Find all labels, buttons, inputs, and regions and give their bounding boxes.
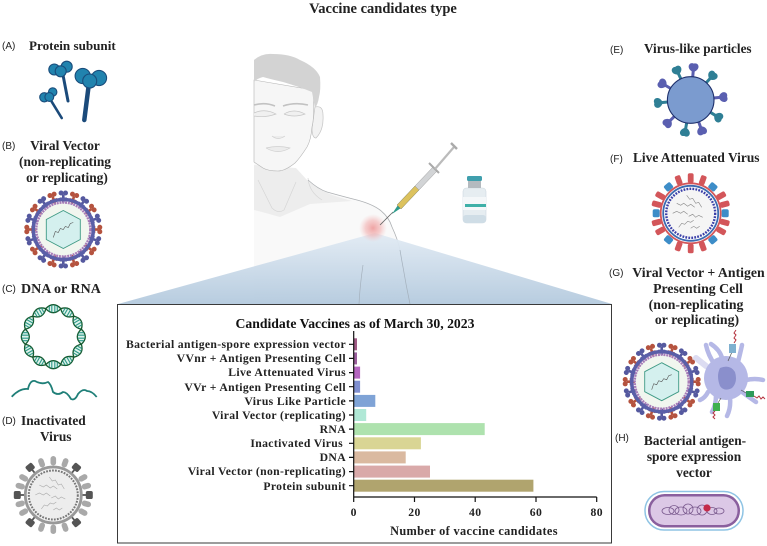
icon: inactivated virus particle — [14, 456, 93, 534]
label F: (F) — [610, 154, 623, 165]
icon: virus-like particle — [654, 63, 728, 137]
category labels: Virus Like Particle — [244, 395, 346, 408]
x axis tick labels: 0 — [351, 506, 357, 519]
category labels — [126, 338, 346, 493]
chart title: Candidate Vaccines as of March 30, 2023 — [236, 316, 475, 331]
panel: icon D inactivated virus — [2, 413, 93, 534]
ear — [312, 107, 323, 138]
hair — [254, 54, 320, 108]
icon: protein spikes — [40, 61, 107, 120]
injection site glow — [359, 214, 387, 242]
heading D: Virus — [40, 429, 72, 444]
label A: (A) — [2, 41, 15, 52]
category labels: Protein subunit — [263, 480, 346, 493]
panel: icon G viral vector plus antigen presenting cell — [609, 265, 765, 421]
bars — [354, 338, 533, 492]
icon: viral vector particle — [24, 190, 102, 268]
panel: icon B viral vector — [2, 138, 111, 268]
heading G: Presenting Cell — [653, 281, 743, 296]
axes — [349, 331, 597, 502]
category labels: Bacterial antigen-spore expression vector — [126, 338, 346, 351]
x axis tick labels: 20 — [408, 506, 421, 519]
category labels: DNA — [320, 451, 346, 464]
icon: RNA strand — [12, 381, 97, 399]
icon: bacterial spore capsule — [645, 492, 743, 530]
syringe — [380, 143, 457, 225]
neck — [254, 165, 352, 217]
panel: icon H bacterial spore vector — [615, 433, 746, 530]
heading D: Inactivated — [21, 413, 86, 428]
heading B: or replicating) — [26, 170, 108, 185]
heading A: Protein subunit — [29, 38, 116, 53]
heading E: Virus-like particles — [644, 41, 752, 56]
category labels: Inactivated Virus — [250, 437, 343, 450]
body and shoulder — [254, 160, 410, 304]
x axis tick labels — [351, 506, 603, 519]
panel: icon C DNA or RNA — [2, 282, 102, 399]
heading H: spore expression — [647, 449, 742, 464]
heading B: Viral Vector — [30, 138, 100, 153]
panel: icon A protein subunit — [2, 38, 116, 120]
label G: (G) — [609, 268, 623, 279]
heading F: Live Attenuated Virus — [633, 150, 759, 165]
heading H: Bacterial antigen- — [644, 433, 746, 448]
nose and mouth — [266, 136, 290, 152]
label H: (H) — [615, 433, 629, 444]
panel: icon F live attenuated virus — [610, 150, 759, 253]
category labels: Viral Vector (replicating) — [212, 409, 346, 422]
heading B: (non-replicating — [19, 154, 111, 169]
x axis tick labels: 60 — [530, 506, 542, 519]
panel: bar chart candidate vaccines — [118, 304, 612, 543]
category labels: VVnr + Antigen Presenting Cell — [177, 352, 346, 365]
icon: live attenuated virus particle — [651, 173, 730, 253]
blue magnification beam — [118, 233, 612, 304]
heading H: vector — [676, 465, 712, 480]
category labels: RNA — [320, 423, 346, 436]
category labels: Live Attenuated Virus — [228, 366, 346, 379]
face — [254, 80, 314, 171]
label C: (C) — [2, 284, 16, 295]
label B: (B) — [2, 141, 15, 152]
panel: icon E virus-like particles — [610, 41, 752, 137]
label D: (D) — [2, 416, 16, 427]
category labels: Viral Vector (non-replicating) — [188, 465, 346, 478]
x axis tick labels: 80 — [591, 506, 603, 519]
label E: (E) — [610, 45, 623, 56]
illustration: person receiving vaccine — [118, 54, 612, 304]
eyes and brows — [254, 104, 308, 106]
receptors and antigens — [728, 352, 732, 361]
heading C: DNA or RNA — [21, 282, 102, 297]
heading G: (non-replicating — [649, 297, 743, 313]
heading G: or replicating) — [655, 312, 739, 328]
icon: circular DNA — [21, 305, 85, 369]
category labels: VVr + Antigen Presenting Cell — [184, 381, 346, 394]
icon: antigen presenting cell — [696, 330, 765, 419]
x axis tick labels: 40 — [469, 506, 481, 519]
title: Vaccine candidates type — [309, 1, 457, 17]
vaccine vial — [463, 176, 486, 223]
heading G: Viral Vector + Antigen — [632, 265, 765, 280]
icon: viral vector particle — [623, 343, 701, 421]
x axis title: Number of vaccine candidates — [390, 524, 558, 538]
